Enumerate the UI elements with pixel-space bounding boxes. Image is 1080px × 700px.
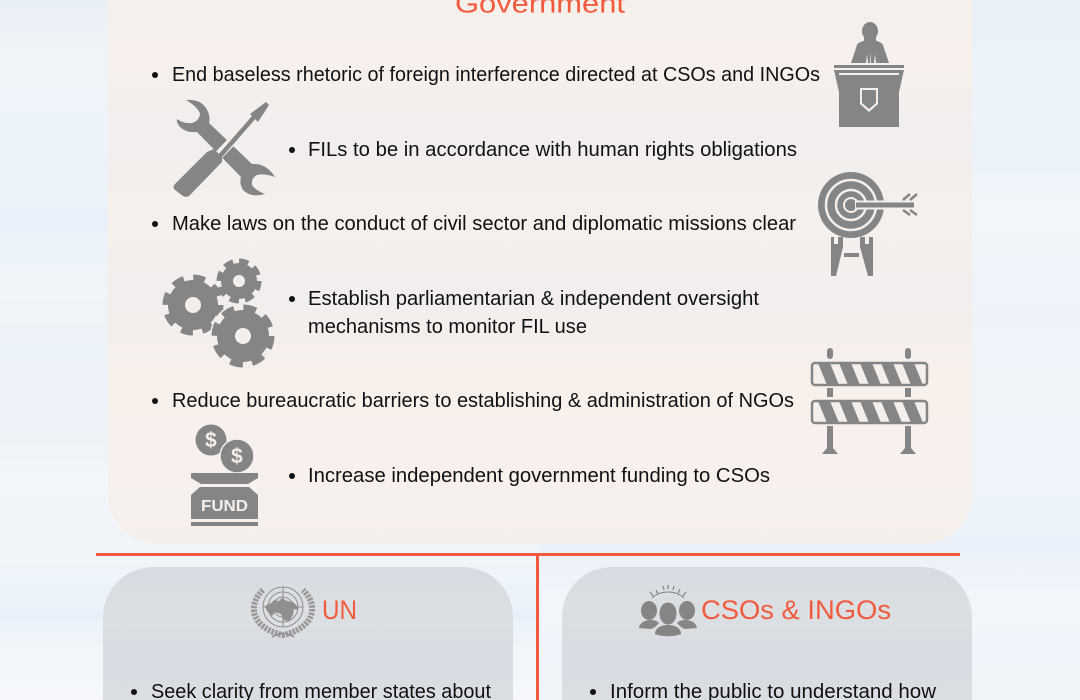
bullet list: government recommendations: mechanisms to monitor FIL use bbox=[308, 316, 587, 338]
vertical divider bbox=[536, 556, 539, 700]
bullet list: government recommendations bbox=[152, 64, 820, 487]
icon: UN emblem bbox=[254, 587, 312, 637]
bullet list: government recommendations: FILs to be in accordance with human rights obligations bbox=[308, 139, 797, 161]
icon: group of people bbox=[639, 585, 697, 636]
bullet list: government recommendations: Establish parliamentarian & independent oversight bbox=[308, 288, 759, 310]
icon: barrier bbox=[812, 348, 927, 454]
icon: fund weight with coins: FUND bbox=[201, 498, 248, 515]
icon: fund weight with coins bbox=[191, 424, 258, 526]
icon: wrench and screwdriver bbox=[174, 100, 275, 197]
bullet list: government recommendations: Increase independent government funding to CSOs bbox=[308, 465, 770, 487]
icon: target with arrow bbox=[818, 172, 917, 276]
icon: fund weight with coins: $ bbox=[205, 429, 217, 452]
heading: UN: UN bbox=[322, 595, 357, 625]
icon: speaker at podium bbox=[834, 22, 904, 127]
panel: government bbox=[108, 0, 972, 544]
icon: gears bbox=[166, 261, 276, 369]
heading: CSOs and INGOs: CSOs & INGOs bbox=[701, 595, 891, 625]
panel: CSOs and INGOs bbox=[562, 567, 972, 700]
panel: UN bbox=[103, 567, 513, 700]
icon: fund weight with coins: $ bbox=[231, 445, 243, 468]
bullet list: government recommendations: Make laws on the conduct of civil sector and diplomatic missions clear bbox=[172, 213, 796, 235]
bullet list: government recommendations: End baseless rhetoric of foreign interference directed at CSOs and INGOs bbox=[172, 64, 820, 86]
horizontal divider bbox=[96, 553, 960, 556]
bullet list: government recommendations: Reduce bureaucratic barriers to establishing & administration of NGOs bbox=[172, 390, 794, 412]
